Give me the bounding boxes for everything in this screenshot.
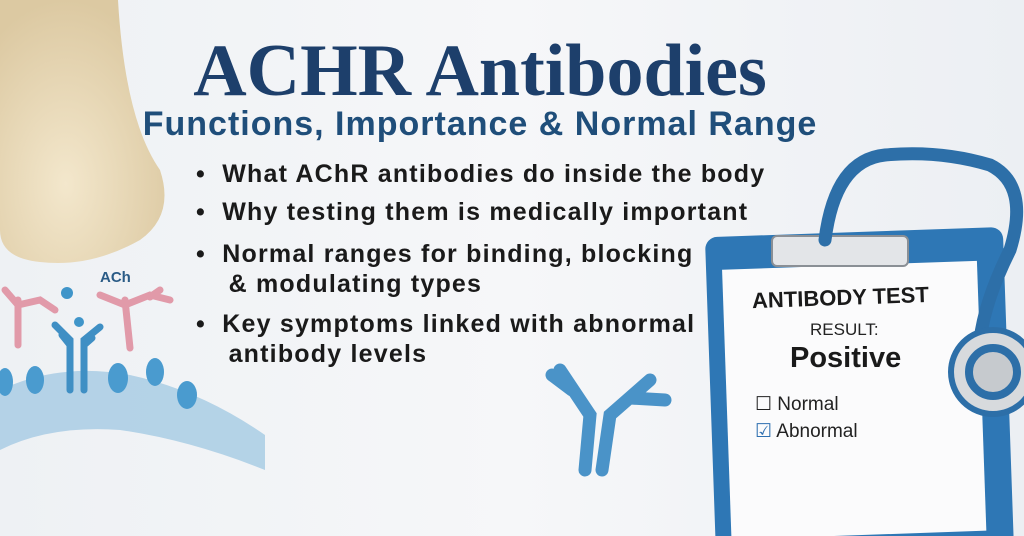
clip — [772, 236, 908, 266]
bullet list — [196, 160, 765, 368]
blue antibody — [55, 325, 100, 390]
text: RESULT: — [810, 320, 879, 339]
illustration: neuromuscular junction — [0, 0, 265, 470]
title: ACHR Antibodies — [193, 30, 767, 112]
clipboard — [705, 147, 1024, 536]
clipboard text: ANTIBODY TEST — [752, 282, 929, 313]
text: Positive — [790, 342, 901, 374]
membrane — [0, 371, 265, 470]
icon: antibody — [546, 364, 672, 476]
nerve terminal — [0, 0, 164, 263]
bullet list: • Why testing them is medically important — [196, 198, 748, 226]
bullet list: • Key symptoms linked with abnormal — [196, 310, 695, 338]
ACh label: ACh — [100, 269, 131, 286]
subtitle: Functions, Importance & Normal Range — [143, 105, 817, 143]
bullet list: & modulating types — [229, 270, 482, 298]
bullet list: antibody levels — [229, 340, 427, 368]
pink antibodies — [5, 290, 170, 348]
bullet list: • Normal ranges for binding, blocking — [196, 240, 693, 268]
stethoscope — [825, 154, 1017, 365]
text: ☑ Abnormal — [755, 421, 858, 442]
bullet list: • What AChR antibodies do inside the body — [196, 160, 765, 188]
receptors — [0, 358, 197, 409]
text: ☐ Normal — [755, 394, 839, 415]
